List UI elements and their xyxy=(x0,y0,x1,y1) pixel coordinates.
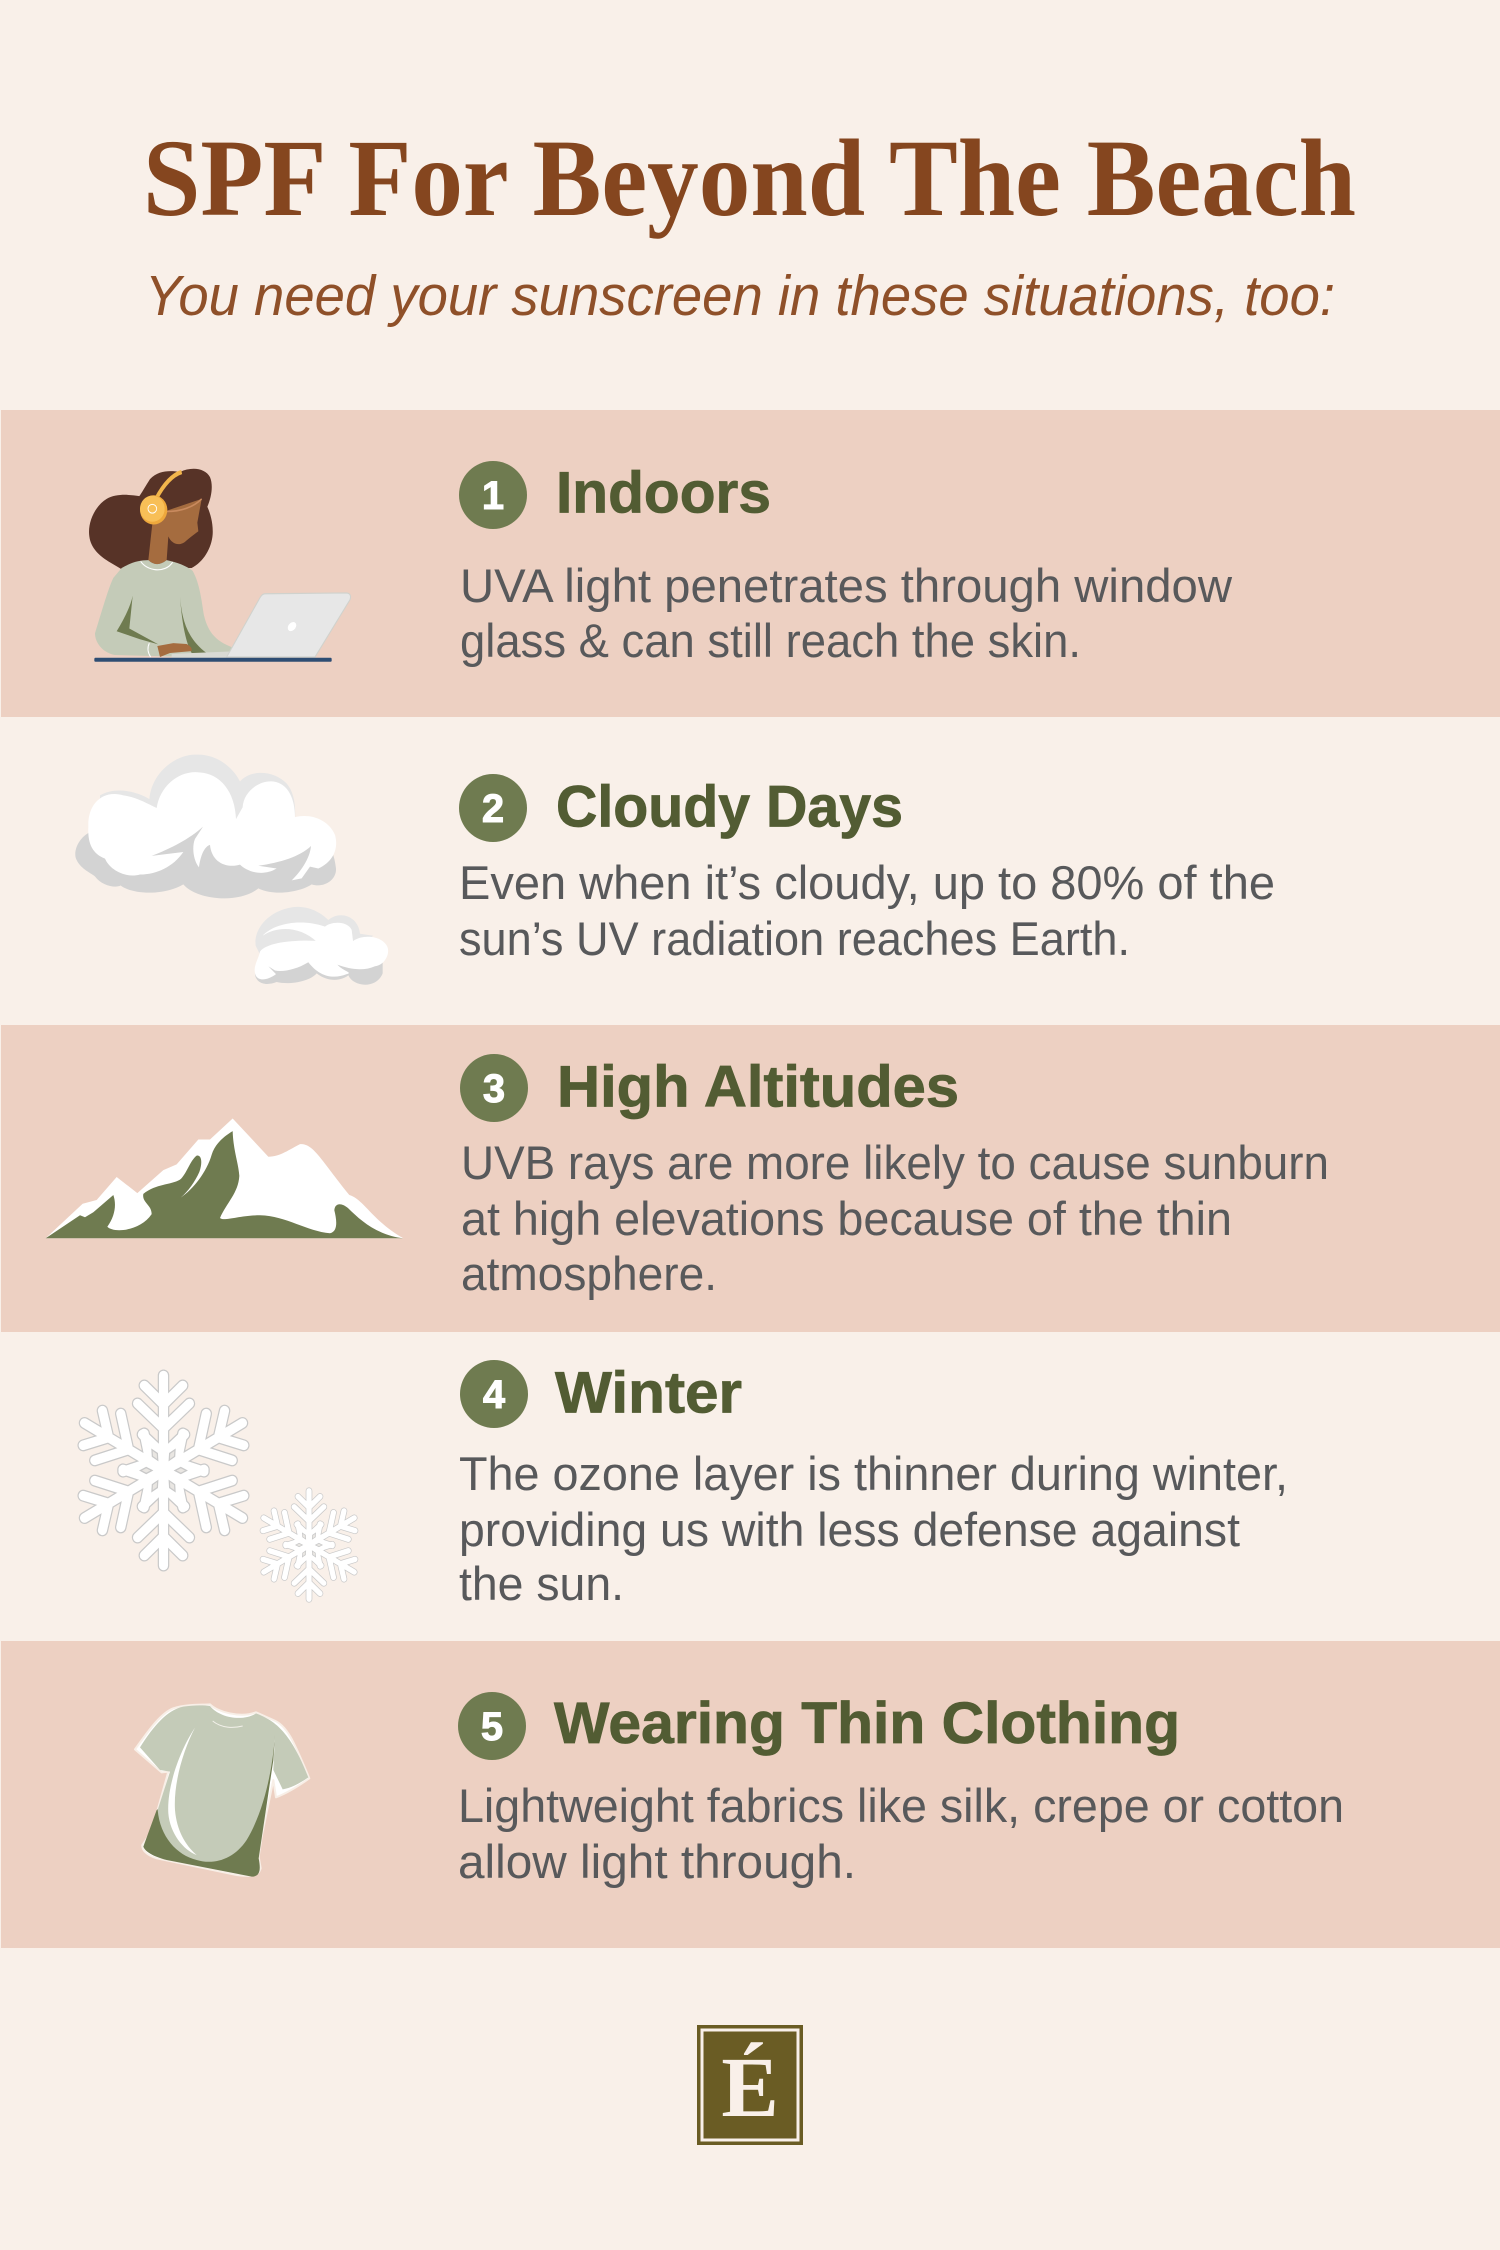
header xyxy=(143,117,1356,328)
number badge 1: 1 xyxy=(482,474,504,518)
body text xyxy=(460,559,1233,667)
body text: Lightweight fabrics like silk, crepe or cotton xyxy=(458,1779,1344,1832)
icon: t-shirt xyxy=(135,1704,309,1877)
body text: sun’s UV radiation reaches Earth. xyxy=(459,912,1130,965)
panel: high altitudes xyxy=(1,1025,1500,1332)
number badge 1 xyxy=(459,461,527,529)
logo xyxy=(697,2025,803,2145)
band xyxy=(1,410,1500,717)
body text xyxy=(459,856,1275,965)
body text: atmosphere. xyxy=(461,1247,717,1300)
panel: indoors xyxy=(1,410,1500,717)
panel: wearing thin clothing xyxy=(1,1641,1500,1948)
body text xyxy=(458,1779,1344,1888)
body text xyxy=(461,1136,1329,1300)
body text: UVB rays are more likely to cause sunburn xyxy=(461,1136,1329,1189)
panel: winter xyxy=(72,1360,1288,1610)
icon: woman with headphones at laptop xyxy=(89,469,351,662)
body text: The ozone layer is thinner during winter, xyxy=(459,1447,1288,1500)
number badge 4 xyxy=(460,1360,528,1428)
heading: High Altitudes: High Altitudes xyxy=(557,1054,959,1120)
subtitle: You need your sunscreen in these situations, too: xyxy=(145,264,1335,328)
icon: clouds xyxy=(75,755,388,985)
heading: Winter: Winter xyxy=(555,1360,742,1426)
title: SPF For Beyond The Beach xyxy=(143,117,1356,239)
number badge 2: 2 xyxy=(482,787,504,831)
number badge 4: 4 xyxy=(483,1373,506,1417)
body text xyxy=(459,1447,1288,1610)
number badge 5: 5 xyxy=(481,1705,503,1749)
band xyxy=(1,1025,1500,1332)
number badge 3 xyxy=(460,1054,528,1122)
body text: glass & can still reach the skin. xyxy=(460,614,1081,667)
number badge 3: 3 xyxy=(483,1067,505,1111)
body text: the sun. xyxy=(459,1557,624,1610)
number badge 2 xyxy=(459,774,527,842)
body text: at high elevations because of the thin xyxy=(461,1192,1232,1245)
icon: snowflakes xyxy=(72,1376,362,1599)
heading: Wearing Thin Clothing: Wearing Thin Clothing xyxy=(554,1691,1180,1756)
body text: providing us with less defense against xyxy=(459,1503,1240,1556)
heading: Cloudy Days: Cloudy Days xyxy=(556,774,903,840)
body text: allow light through. xyxy=(458,1835,856,1888)
band xyxy=(1,1641,1500,1948)
number badge 5 xyxy=(458,1692,526,1760)
panel: cloudy days xyxy=(75,755,1275,985)
body text: UVA light penetrates through window xyxy=(460,559,1233,612)
heading: Indoors: Indoors xyxy=(556,460,771,526)
body text: Even when it’s cloudy, up to 80% of the xyxy=(459,856,1275,909)
icon: mountain xyxy=(46,1118,403,1238)
logo: É xyxy=(721,2039,779,2135)
